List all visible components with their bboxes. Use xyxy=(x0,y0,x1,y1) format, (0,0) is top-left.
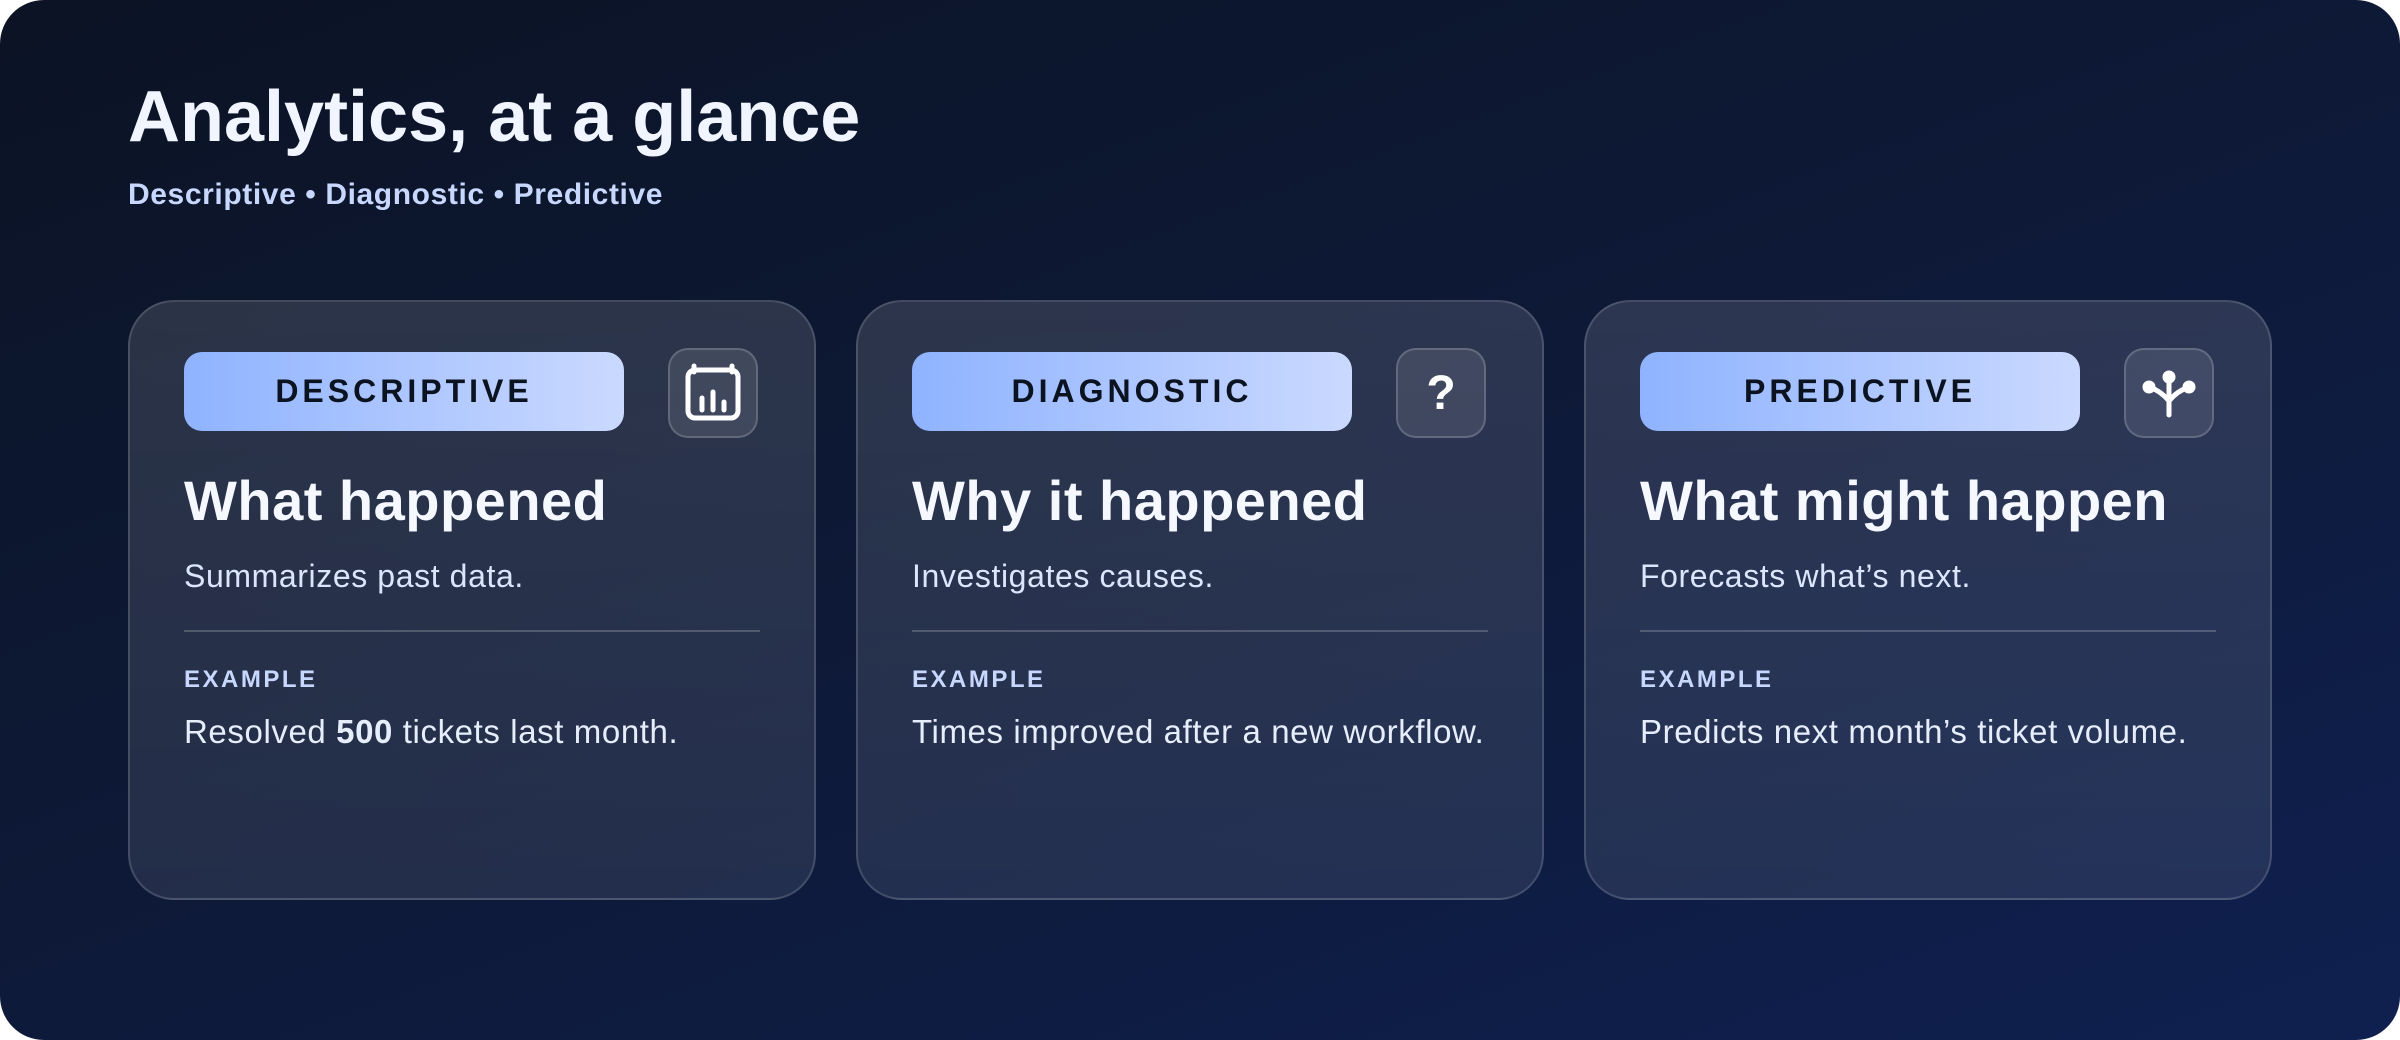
icon: question mark: ? xyxy=(1426,366,1456,420)
pill: diagnostic xyxy=(912,352,1352,431)
heading: What might happen xyxy=(1640,469,2168,532)
example text: Times improved after a new workflow. xyxy=(912,713,1484,750)
heading: Why it happened xyxy=(912,469,1368,532)
pill: predictive xyxy=(1640,352,2080,431)
heading: What happened xyxy=(184,469,607,532)
example label: EXAMPLE xyxy=(1640,666,1774,693)
panel: predictive xyxy=(1584,300,2272,900)
panel: descriptive xyxy=(128,300,816,900)
example text: Resolved 500 tickets last month. xyxy=(184,713,678,750)
title: Analytics, at a glance xyxy=(128,77,860,157)
example text: Predicts next month’s ticket volume. xyxy=(1640,713,2187,750)
description: Forecasts what’s next. xyxy=(1640,558,1971,594)
icon: question mark xyxy=(1396,348,1486,438)
pill: predictive: PREDICTIVE xyxy=(1744,373,1976,409)
example label: EXAMPLE xyxy=(912,666,1046,693)
description: Summarizes past data. xyxy=(184,558,524,594)
subtitle: Descriptive • Diagnostic • Predictive xyxy=(128,178,663,211)
pill: descriptive: DESCRIPTIVE xyxy=(275,373,533,409)
icon: branching xyxy=(2124,348,2214,438)
pill: diagnostic: DIAGNOSTIC xyxy=(1012,373,1252,409)
pill: descriptive xyxy=(184,352,624,431)
example label: EXAMPLE xyxy=(184,666,318,693)
panel: diagnostic xyxy=(856,300,1544,900)
icon: calendar chart xyxy=(668,348,758,438)
description: Investigates causes. xyxy=(912,558,1214,594)
